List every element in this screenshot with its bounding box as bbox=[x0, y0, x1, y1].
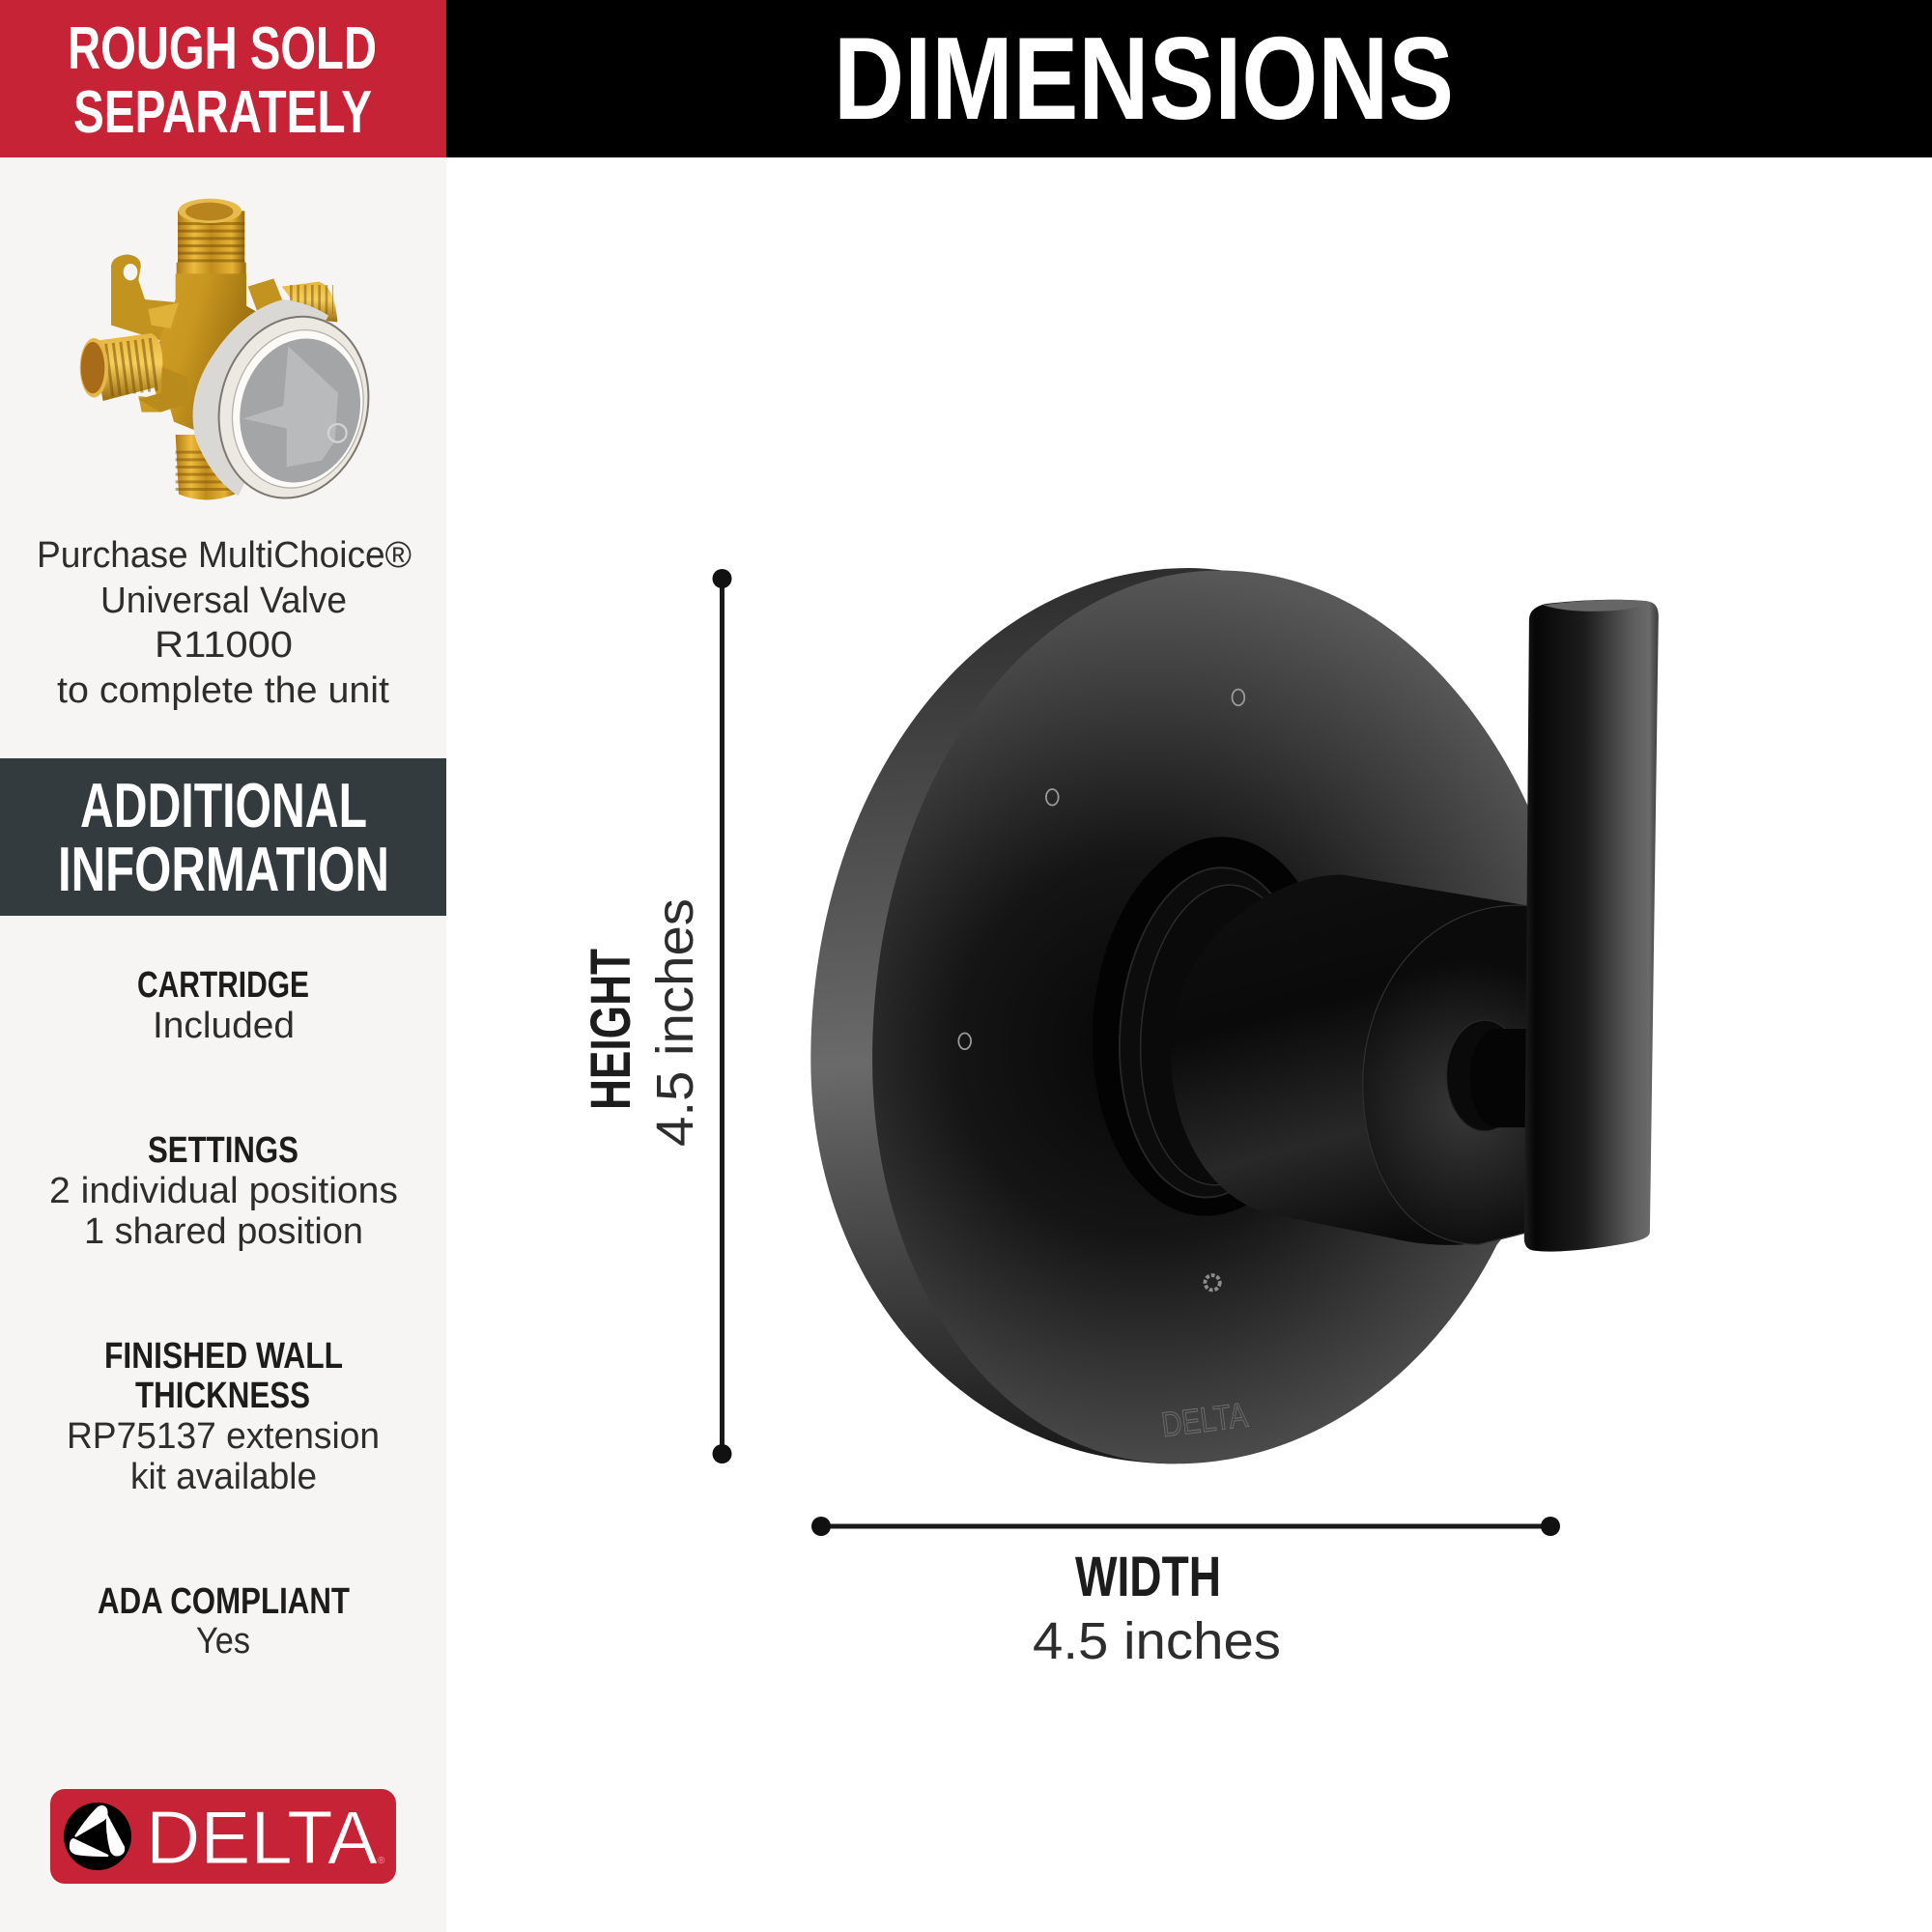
heading: additional information bbox=[0, 758, 446, 916]
text: finished wall thickness: RP75137 extension bbox=[67, 1416, 380, 1457]
left threaded pipe bbox=[80, 333, 162, 401]
text: finished wall thickness bbox=[67, 1336, 380, 1497]
banner: rough sold separately: ROUGH SOLD bbox=[68, 15, 377, 82]
text: finished wall thickness: kit available bbox=[130, 1457, 317, 1497]
label: height bbox=[580, 898, 704, 1147]
text: purchase note: Purchase MultiChoice® bbox=[37, 535, 412, 576]
lever bbox=[1524, 600, 1659, 1252]
text: settings: SETTINGS bbox=[148, 1130, 298, 1171]
heading: additional information: ADDITIONAL bbox=[80, 770, 367, 840]
logo: delta bbox=[50, 1789, 396, 1884]
knob face bbox=[1363, 905, 1528, 1244]
stem bbox=[1446, 1020, 1528, 1131]
banner: rough sold separately bbox=[0, 0, 446, 157]
banner: rough sold separately: SEPARATELY bbox=[73, 79, 372, 146]
logo: delta: ® bbox=[378, 1856, 385, 1866]
text: purchase note bbox=[37, 535, 412, 711]
text: ada compliant bbox=[98, 1581, 350, 1662]
text: cartridge: CARTRIDGE bbox=[137, 965, 309, 1006]
text: settings: 1 shared position bbox=[84, 1211, 363, 1252]
screw dots bbox=[958, 690, 1244, 1049]
knob body bbox=[1171, 875, 1528, 1245]
text: purchase note: Universal Valve bbox=[100, 581, 347, 621]
text: cartridge bbox=[137, 965, 309, 1046]
text: purchase note: to complete the unit bbox=[57, 670, 389, 711]
label: width: 4.5 inches bbox=[1033, 1612, 1281, 1670]
right threaded pipe bbox=[282, 282, 337, 322]
chart: height dimension line bbox=[713, 569, 732, 1463]
text: ada compliant: ADA COMPLIANT bbox=[98, 1581, 350, 1622]
top threaded pipe bbox=[177, 199, 246, 277]
plate face bbox=[872, 571, 1534, 1463]
title: dimensions: DIMENSIONS bbox=[834, 13, 1454, 144]
text: cartridge: Included bbox=[153, 1006, 295, 1046]
valve body bbox=[138, 273, 258, 435]
title: dimensions bbox=[446, 0, 1932, 157]
text: finished wall thickness: FINISHED WALL bbox=[104, 1336, 343, 1377]
white sleeve bbox=[193, 299, 328, 496]
label: width: WIDTH bbox=[1075, 1546, 1221, 1608]
text: settings bbox=[49, 1130, 398, 1252]
plate rim bbox=[810, 568, 1244, 1463]
label: height: 4.5 inches bbox=[646, 898, 704, 1147]
engraved brand: DELTA bbox=[1159, 1396, 1250, 1444]
bottom threaded pipe bbox=[176, 435, 237, 499]
text: purchase note: R11000 bbox=[155, 625, 293, 666]
label: width bbox=[1033, 1546, 1281, 1670]
silver nut bbox=[199, 299, 388, 515]
mounting ear bbox=[111, 254, 181, 345]
label: height: HEIGHT bbox=[580, 949, 642, 1110]
heading: additional information: INFORMATION bbox=[58, 834, 389, 904]
logo: delta: DELTA bbox=[146, 1795, 378, 1880]
text: finished wall thickness: THICKNESS bbox=[135, 1376, 310, 1416]
chart: width dimension line bbox=[811, 1517, 1560, 1536]
certification mark bbox=[1205, 1275, 1220, 1290]
text: ada compliant: Yes bbox=[196, 1621, 250, 1662]
icon: black valve trim with lever handle bbox=[810, 568, 1659, 1463]
panel: sidebar background bbox=[0, 0, 446, 1932]
text: settings: 2 individual positions bbox=[49, 1171, 398, 1211]
escutcheon ring bbox=[1080, 829, 1348, 1224]
grey plastic core bbox=[224, 325, 376, 497]
icon: brass rough valve bbox=[80, 199, 388, 515]
